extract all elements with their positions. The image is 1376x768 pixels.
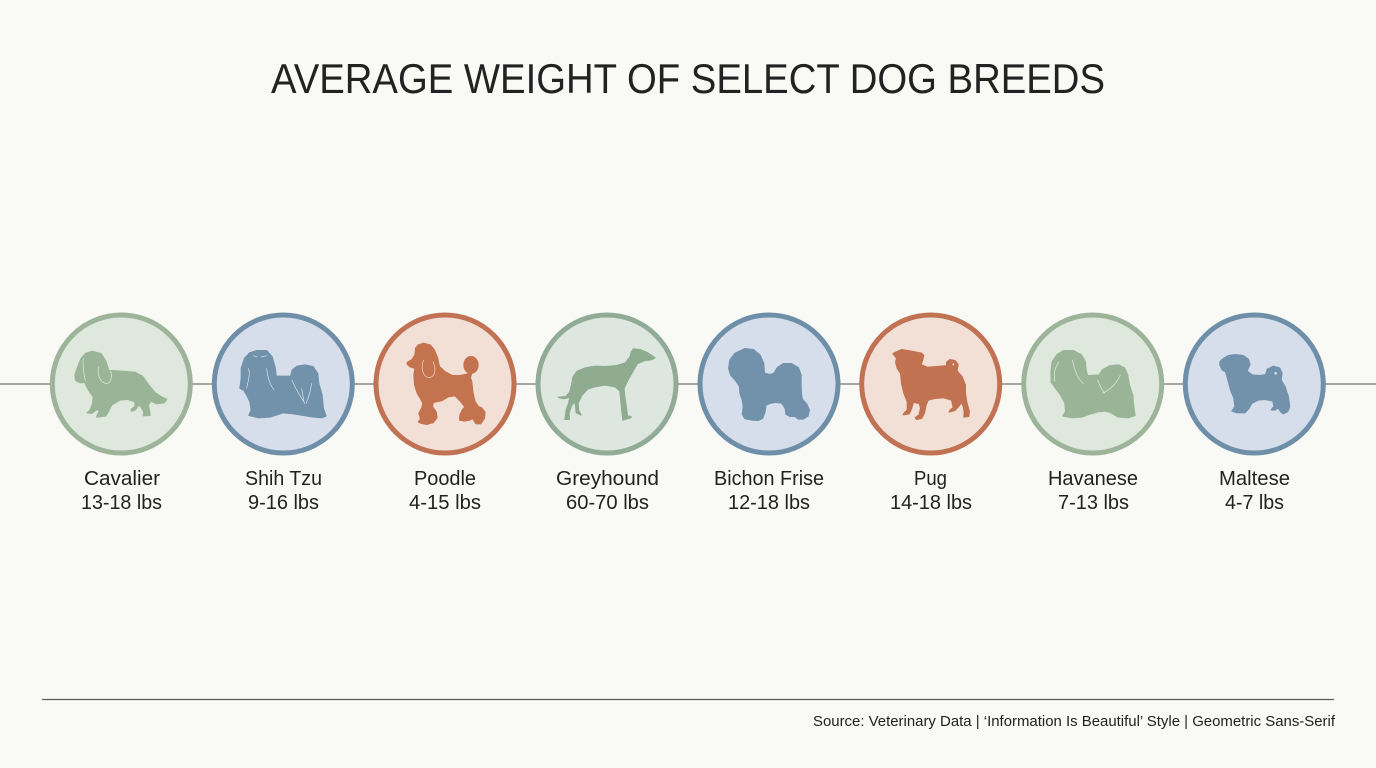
- breed: Maltese: [1185, 315, 1323, 514]
- label: Shih Tzu: Shih Tzu: [245, 467, 322, 490]
- timeline connector: [0, 383, 1376, 385]
- label: Bichon Frise: Bichon Frise: [714, 467, 824, 490]
- icon: Greyhound silhouette: [558, 349, 655, 420]
- breed: Cavalier: [52, 315, 190, 514]
- icon: Bichon Frise silhouette: [729, 349, 809, 420]
- circle: Shih Tzu: [214, 315, 352, 453]
- icon: Maltese silhouette: [1220, 355, 1290, 414]
- breed: Greyhound: [538, 315, 676, 514]
- value: Cavalier: 13-18 lbs: [81, 491, 162, 514]
- value: Greyhound: 60-70 lbs: [566, 491, 649, 514]
- breed: Shih Tzu: [214, 315, 352, 514]
- label: Cavalier: Cavalier: [84, 467, 160, 490]
- circle: Bichon Frise: [700, 315, 838, 453]
- circle: Maltese: [1185, 315, 1323, 453]
- circle: Havanese: [1024, 315, 1162, 453]
- label: Havanese: Havanese: [1048, 467, 1138, 490]
- icon: Shih Tzu silhouette: [240, 351, 326, 418]
- label: Poodle: Poodle: [414, 467, 476, 490]
- circle: Pug: [862, 315, 1000, 453]
- label: Maltese: Maltese: [1219, 467, 1290, 490]
- icon: Havanese silhouette: [1051, 351, 1135, 418]
- icon: Pug silhouette: [893, 350, 969, 419]
- icon: Cavalier silhouette: [75, 351, 167, 417]
- title: AVERAGE WEIGHT OF SELECT DOG BREEDS: [271, 55, 1105, 102]
- breed: Poodle: [376, 315, 514, 514]
- breed: Pug: [862, 315, 1000, 514]
- value: Poodle: 4-15 lbs: [409, 491, 481, 514]
- value: Pug: 14-18 lbs: [890, 491, 972, 514]
- value: Havanese: 7-13 lbs: [1058, 491, 1129, 514]
- value: Maltese: 4-7 lbs: [1225, 491, 1284, 514]
- breed: Havanese: [1024, 315, 1162, 514]
- label: Pug: Pug: [914, 467, 947, 490]
- circle: Poodle: [376, 315, 514, 453]
- breed: Bichon Frise: [700, 315, 838, 514]
- source footer: Source: Veterinary Data | ‘Information Is Beautiful’ Style | Geometric Sans-Serif: [813, 714, 1336, 730]
- value: Bichon Frise: 12-18 lbs: [728, 491, 810, 514]
- circle: Cavalier: [52, 315, 190, 453]
- icon: Poodle silhouette: [407, 343, 485, 424]
- circle: Greyhound: [538, 315, 676, 453]
- label: Greyhound: Greyhound: [556, 467, 659, 490]
- value: Shih Tzu: 9-16 lbs: [248, 491, 319, 514]
